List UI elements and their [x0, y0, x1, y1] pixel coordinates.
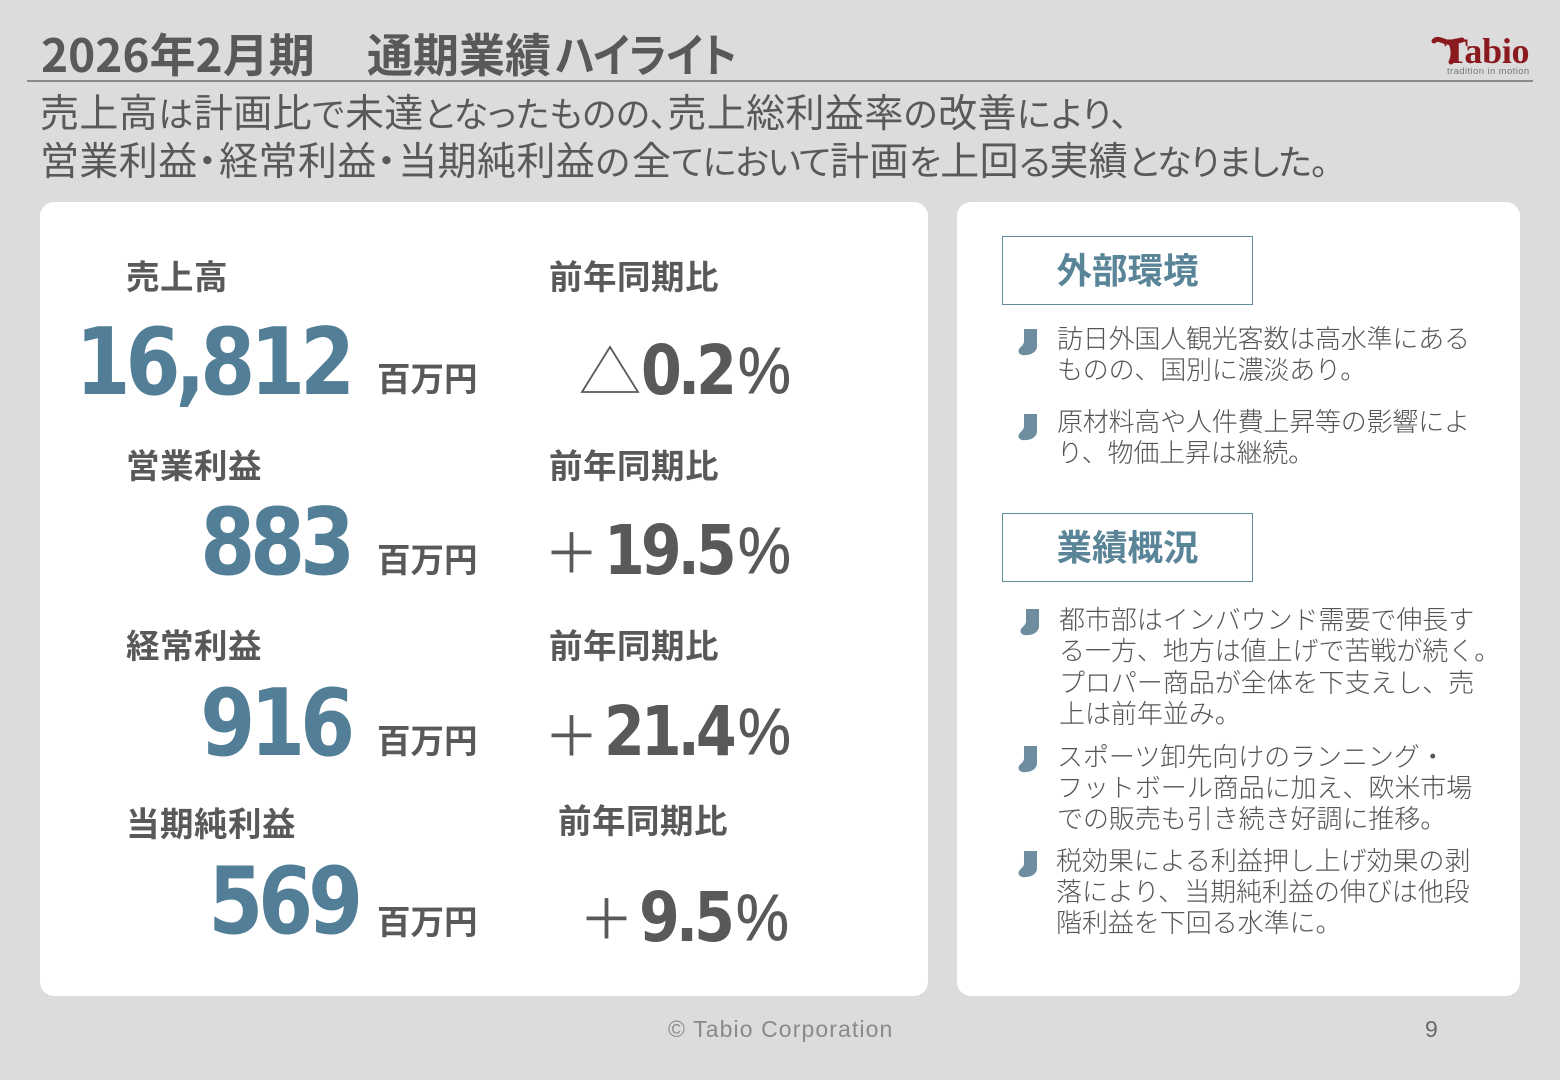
text: フットボール商品に加え、欧米市場: [1057, 768, 1472, 805]
text: スポーツ卸先向けのランニング・: [1057, 737, 1446, 774]
metric: net profit: [126, 794, 789, 958]
text: り、物価上昇は継続。: [1057, 433, 1314, 470]
logo mark: Tabio: [1444, 31, 1529, 71]
yoy label: 前年同期比: [549, 619, 719, 668]
text: プロパー商品が全体を下支えし、売: [1059, 663, 1474, 700]
footer: copyright: © Tabio Corporation: [668, 1016, 893, 1042]
yoy value: 0.2: [641, 331, 733, 411]
bullet 3: [1020, 600, 1500, 731]
yoy value: 21.4: [604, 692, 733, 772]
label: 営業利益: [126, 439, 262, 488]
text: る一方、地方は値上げで苦戦が続く。: [1059, 631, 1500, 668]
bullet 2: [1018, 402, 1470, 470]
subtitle: [40, 83, 1327, 187]
logo: Tabio: [1432, 31, 1530, 77]
title text: 通期業績: [367, 20, 551, 86]
text: 落により、当期純利益の伸びは他段: [1056, 872, 1470, 909]
yoy: triangle: [580, 345, 640, 393]
text: [1059, 600, 1500, 731]
unit: 百万円: [377, 714, 478, 763]
metric: net sales: [76, 250, 791, 416]
bullet 5: [1018, 841, 1470, 940]
yoy value: 19.5: [604, 511, 733, 591]
footer: page number: 9: [1425, 1016, 1438, 1042]
title: [41, 20, 736, 86]
yoy percent: %: [738, 333, 791, 407]
subtitle line 1: 売上高は計画比で未達となったものの、売上総利益率の改善により、: [40, 83, 1129, 139]
label: 当期純利益: [126, 797, 296, 846]
heading: external environment: [1002, 236, 1253, 305]
text: での販売も引き続き好調に推移。: [1057, 799, 1446, 836]
icon: sock: [1018, 851, 1037, 878]
yoy label: 前年同期比: [549, 439, 719, 488]
unit: 百万円: [377, 533, 478, 582]
bullet 4: [1018, 737, 1472, 836]
icon: sock: [1018, 329, 1037, 356]
yoy percent: %: [736, 880, 789, 954]
text: 原材料高や人件費上昇等の影響によ: [1057, 402, 1470, 439]
label: 売上高: [126, 250, 228, 299]
unit: 百万円: [377, 895, 478, 944]
title rule: [27, 80, 1533, 82]
text: [1057, 737, 1472, 836]
text: 訪日外国人観光客数は高水準にある: [1057, 319, 1470, 356]
heading: business overview: [1002, 513, 1253, 582]
icon: sock: [1018, 746, 1037, 772]
panel: commentary: [957, 202, 1520, 996]
value: 916: [200, 669, 350, 777]
text: 税効果による利益押し上げ効果の剥: [1056, 841, 1470, 878]
yoy plus: ＋: [544, 509, 599, 589]
title katakana: ハイライト: [555, 20, 736, 86]
text: [1056, 841, 1470, 940]
value: 569: [208, 847, 358, 955]
logo swash: [1432, 36, 1464, 64]
value: 883: [200, 488, 350, 596]
yoy plus: ＋: [579, 875, 634, 955]
yoy percent: %: [738, 513, 791, 587]
icon: sock: [1020, 609, 1039, 636]
text: [1057, 319, 1470, 387]
unit: 百万円: [377, 352, 478, 401]
icon: sock: [1018, 414, 1037, 440]
subtitle line 2: 営業利益・経常利益・当期純利益の全てにおいて計画を上回る実績となりました。: [40, 131, 1327, 187]
label: 経常利益: [126, 619, 262, 668]
text: 階利益を下回る水準に。: [1056, 903, 1341, 940]
panel: results: [40, 202, 928, 996]
metric: ordinary profit: [126, 619, 791, 777]
text: ものの、国別に濃淡あり。: [1057, 350, 1366, 387]
heading: external environment: 外部環境: [1056, 243, 1198, 294]
bullet 1: [1018, 319, 1470, 387]
text: 上は前年並み。: [1059, 694, 1241, 731]
logo tagline: tradition in motion: [1447, 66, 1530, 77]
title period: 2026年2月期: [41, 20, 315, 86]
metric: operating profit: [126, 439, 791, 596]
value: 16,812: [76, 308, 350, 416]
text: [1057, 402, 1470, 470]
yoy percent: %: [738, 694, 791, 768]
yoy value: 9.5: [639, 878, 731, 958]
yoy label: 前年同期比: [558, 794, 728, 843]
yoy label: 前年同期比: [549, 250, 719, 299]
text: 都市部はインバウンド需要で伸長す: [1059, 600, 1474, 637]
heading: business overview: 業績概況: [1056, 520, 1198, 571]
yoy plus: ＋: [544, 692, 599, 772]
